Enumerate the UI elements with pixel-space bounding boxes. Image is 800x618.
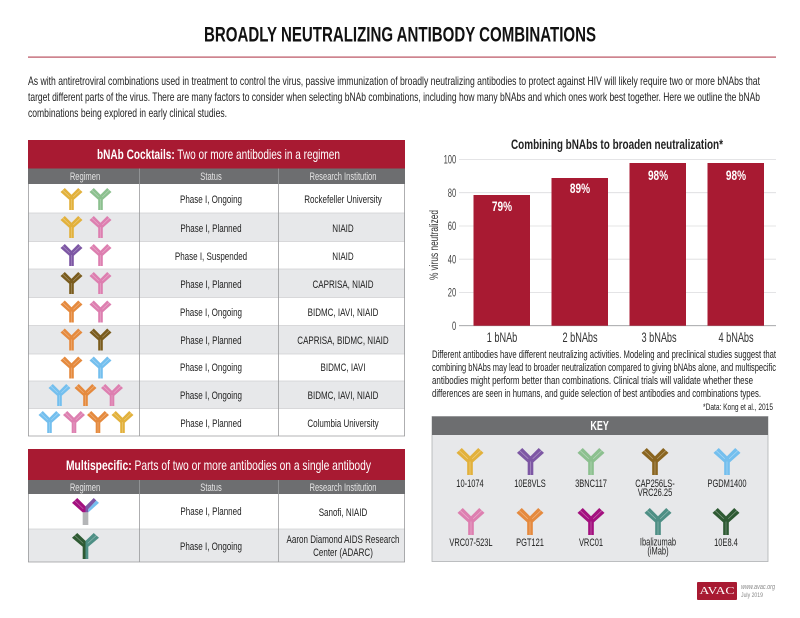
row 9: Phase I, Planned [180,418,242,430]
panel: multispecific table: Aaron Diamond AIDS Research [287,534,399,546]
key: VRC01 [578,508,604,548]
logo: AVAC: AVAC [700,585,734,597]
panel: multispecific table: Center (ADARC) [313,547,373,559]
key: VRC07-523L [449,508,493,548]
website and date: July 2019 [741,593,764,599]
logo: AVAC [697,582,737,600]
row 3 [60,244,354,266]
panel: multispecific table [28,449,405,562]
website and date [741,584,775,599]
key: PGT121 [516,508,544,548]
panel: bNAb cocktails table: Research Institution [309,171,377,183]
key: 3BNC117: 3BNC117 [575,476,607,489]
key: Ibalizumab (iMab): (iMab) [647,544,669,557]
key: VRC01: VRC01 [579,535,603,548]
key: CAP256LS-VRC26.25: CAP256LS- [635,476,675,489]
title: BROADLY NEUTRALIZING ANTIBODY COMBINATIONS [204,24,596,46]
row 5: Phase I, Ongoing [180,307,242,319]
key: 3BNC117 [575,448,607,489]
panel: multispecific table: Phase I, Planned [180,506,242,518]
row 8 [48,384,378,406]
row 7 [60,356,365,378]
chart: bNAbs neutralization bar chart: 79% [492,198,512,214]
row 1: Phase I, Ongoing [180,194,242,206]
panel: multispecific table: Sanofi, NIAID [319,507,367,519]
chart: bNAbs neutralization bar chart: 0 [452,321,457,334]
row 4 [60,272,374,294]
key: 10E8VLS: 10E8VLS [514,476,546,489]
row 6: Phase I, Planned [180,335,242,347]
row 7: Phase I, Ongoing [180,362,242,374]
key: CAP256LS-VRC26.25 [635,448,675,498]
key: PGDM1400 [707,448,747,489]
panel: bNAb cocktails table [28,140,405,436]
row 6 [60,328,389,350]
chart: bNAbs neutralization bar chart: 98% [726,167,746,183]
key: VRC07-523L: VRC07-523L [449,535,493,548]
row 5: BIDMC, IAVI, NIAID [308,307,378,319]
chart: bNAbs neutralization bar chart: 2 bNAbs [562,331,598,346]
key: 10-1074: 10-1074 [456,476,484,489]
panel: multispecific table: Phase I, Ongoing [180,541,242,553]
chart: bNAbs neutralization bar chart [429,137,776,346]
chart: bNAbs neutralization bar chart: 100 [444,154,457,167]
panel: key: KEY [590,420,609,433]
key: Ibalizumab (iMab) [640,508,676,557]
intro text: combinations being explored in early clinical studies. [28,106,227,120]
chart: bNAbs neutralization bar chart: 40 [448,254,457,267]
chart description: *Data: Kong et al., 2015 [703,402,773,412]
row 3: NIAID [332,251,354,263]
intro text [28,74,760,120]
row 8: BIDMC, IAVI, NIAID [308,390,378,402]
row 3: Phase I, Suspended [175,251,247,263]
key: CAP256LS-VRC26.25: VRC26.25 [638,485,672,498]
row 2 [60,216,354,238]
panel: multispecific table: Research Institution [309,482,377,494]
website and date: www.avac.org [741,584,775,591]
chart: bNAbs neutralization bar chart: % virus neutralized [429,210,441,280]
panel: multispecific table: Regimen [70,482,100,494]
chart: bNAbs neutralization bar chart: 1 bNAb [487,331,517,346]
chart: bNAbs neutralization bar chart: 3 bNAbs [641,331,677,346]
row 4: Phase I, Planned [180,279,242,291]
row 9: Columbia University [307,418,379,430]
multispecific heading: Multispecific: Parts of two or more antibodies on a single antibody [66,457,371,473]
icon: trispecific antibody [72,533,99,559]
cocktails heading: bNAb Cocktails: Two or more antibodies in a regimen [97,146,340,162]
panel: multispecific table: Status [200,482,222,494]
row 5 [60,300,378,322]
chart: bNAbs neutralization bar chart: 20 [448,287,457,300]
chart: bNAbs neutralization bar chart: 80 [448,188,457,201]
row 2: Phase I, Planned [180,223,242,235]
row 2: NIAID [332,223,354,235]
panel: bNAb cocktails table: Regimen [70,171,100,183]
chart description [432,349,776,412]
key: 10-1074 [456,448,484,489]
key: 10E8.4: 10E8.4 [714,535,738,548]
row 7: BIDMC, IAVI [321,362,365,374]
row 6: CAPRISA, BIDMC, NIAID [297,335,389,347]
row 9 [38,411,379,433]
chart: bNAbs neutralization bar chart: 89% [570,180,590,196]
row 1 [60,188,382,210]
icon: bispecific antibody [72,498,99,525]
key: 10E8VLS [514,448,546,489]
row 8: Phase I, Ongoing [180,390,242,402]
key: Ibalizumab (iMab): Ibalizumab [640,535,676,548]
chart: bNAbs neutralization bar chart: 4 bNAbs [718,331,754,346]
key: PGT121: PGT121 [516,535,544,548]
row 1: Rockefeller University [304,194,382,206]
row 4: CAPRISA, NIAID [312,279,374,291]
chart title: Combining bNAbs to broaden neutralization* [511,137,724,152]
key: 10E8.4 [712,508,740,548]
chart: bNAbs neutralization bar chart: 98% [648,167,668,183]
key: PGDM1400: PGDM1400 [707,476,747,489]
chart: bNAbs neutralization bar chart: 60 [448,221,457,234]
panel: bNAb cocktails table: Status [200,171,222,183]
panel: key [432,416,768,562]
